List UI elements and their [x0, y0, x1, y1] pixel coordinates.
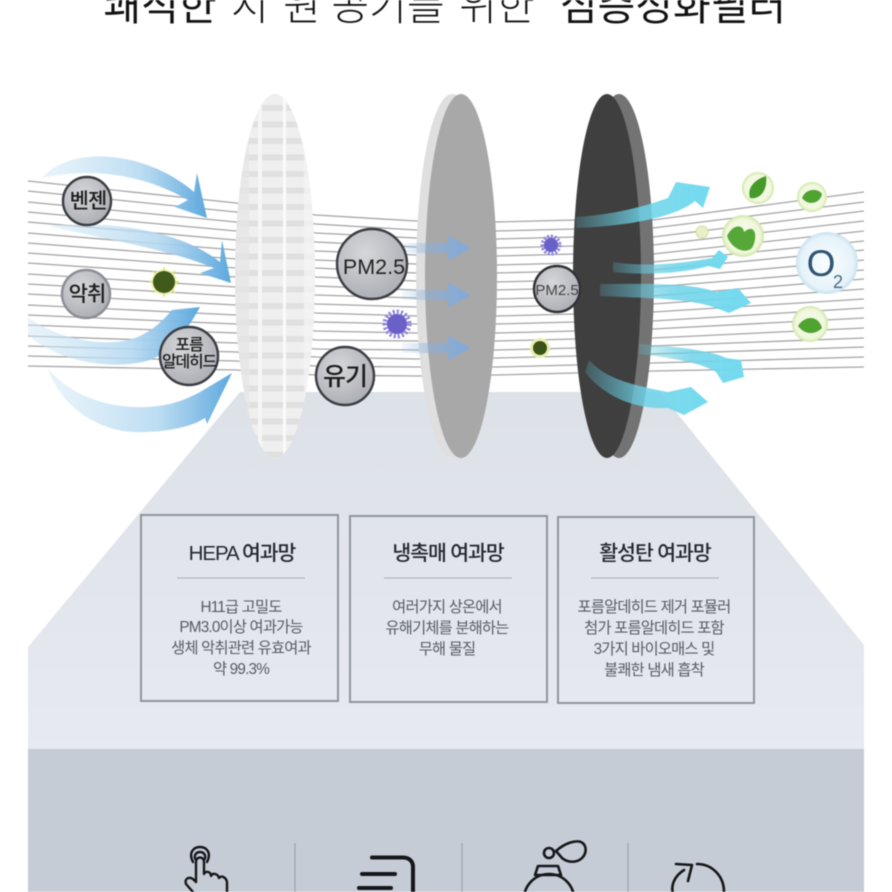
icon: small bubble	[696, 226, 708, 238]
card: activated carbon filter: 불쾌한 냄새 흡착	[604, 661, 705, 679]
card: cold catalyst filter: 여러가지 상온에서	[392, 599, 502, 616]
filter: cold catalyst disc	[416, 94, 497, 458]
card: activated carbon filter: 첨가 포름알데히드 포함	[584, 620, 725, 637]
icon: refresh arrow	[672, 864, 724, 892]
icon: O2 bubble: O	[807, 243, 835, 284]
incoming swirl arrows	[28, 156, 232, 432]
blue arrows through catalyst filter	[402, 235, 470, 361]
icon: leaf bubble top	[742, 172, 774, 204]
card: cold catalyst filter: 무해 물질	[419, 641, 475, 658]
bubble: organic	[316, 347, 374, 405]
swirl arrow 3	[28, 307, 200, 365]
icon: touch hand	[186, 847, 227, 892]
card: activated carbon filter: 3가지 바이오매스 및	[594, 641, 714, 658]
bubble: benzene: 벤젠	[70, 190, 106, 213]
swirl arrow 2	[48, 224, 231, 283]
icon: document lines	[359, 858, 413, 892]
filter: activated carbon disc	[573, 94, 654, 458]
icon: purple virus large	[385, 312, 409, 336]
bubble: PM2.5 large: PM2.5	[343, 255, 405, 279]
icon: green germ large	[149, 267, 179, 297]
bubble: odor: 악취	[69, 283, 105, 306]
icon: leaf bubble bottom	[792, 306, 828, 342]
background panel: filter description shape	[28, 392, 864, 750]
icon: O2 bubble	[796, 232, 858, 294]
bubble: PM2.5 large	[337, 229, 407, 299]
card: activated carbon filter: 포름알데히드 제거 포뮬러	[578, 599, 730, 616]
card: HEPA filter: H11급 고밀도	[200, 599, 282, 616]
card: HEPA filter: 생체 악취관련 유효여과	[171, 640, 312, 657]
icon: leaf bubble right	[797, 182, 827, 212]
swirl arrow 4	[47, 367, 232, 432]
bubble: organic: 유기	[323, 363, 367, 391]
card: HEPA filter: HEPA 여과망	[189, 542, 297, 565]
bubble: odor	[62, 270, 110, 318]
card: activated carbon filter	[558, 517, 754, 703]
card: cold catalyst filter: 유해기체를 분해하는	[386, 620, 509, 637]
bubble: PM2.5 small	[534, 266, 580, 312]
footer panel	[28, 749, 864, 892]
filter: HEPA disc	[235, 94, 315, 458]
card: HEPA filter: 약 99.3%	[213, 661, 270, 678]
card: cold catalyst filter	[350, 516, 547, 702]
air flow lines	[28, 181, 864, 376]
bubble: benzene	[63, 177, 111, 225]
card: HEPA filter: PM3.0이상 여과가능	[179, 619, 303, 636]
card: HEPA filter	[141, 515, 338, 701]
swirl arrow 1	[42, 156, 207, 218]
bubble: formaldehyde: 알데히드	[162, 353, 217, 371]
bubble: formaldehyde: 포름	[175, 336, 203, 354]
card: activated carbon filter: 활성탄 여과망	[599, 542, 712, 565]
bubble: PM2.5 small: PM2.5	[535, 282, 579, 299]
icon: green germ small	[530, 338, 550, 358]
icon: perfume bottle	[524, 841, 586, 892]
bubble: formaldehyde	[160, 327, 218, 385]
teal arrows out of carbon filter	[576, 182, 751, 415]
icon: O2 bubble: 2	[833, 272, 843, 292]
icon: purple virus small	[542, 236, 560, 254]
icon: leaf bubble large	[722, 215, 764, 257]
title	[103, 0, 786, 29]
card: cold catalyst filter: 냉촉매 여과망	[392, 542, 505, 565]
